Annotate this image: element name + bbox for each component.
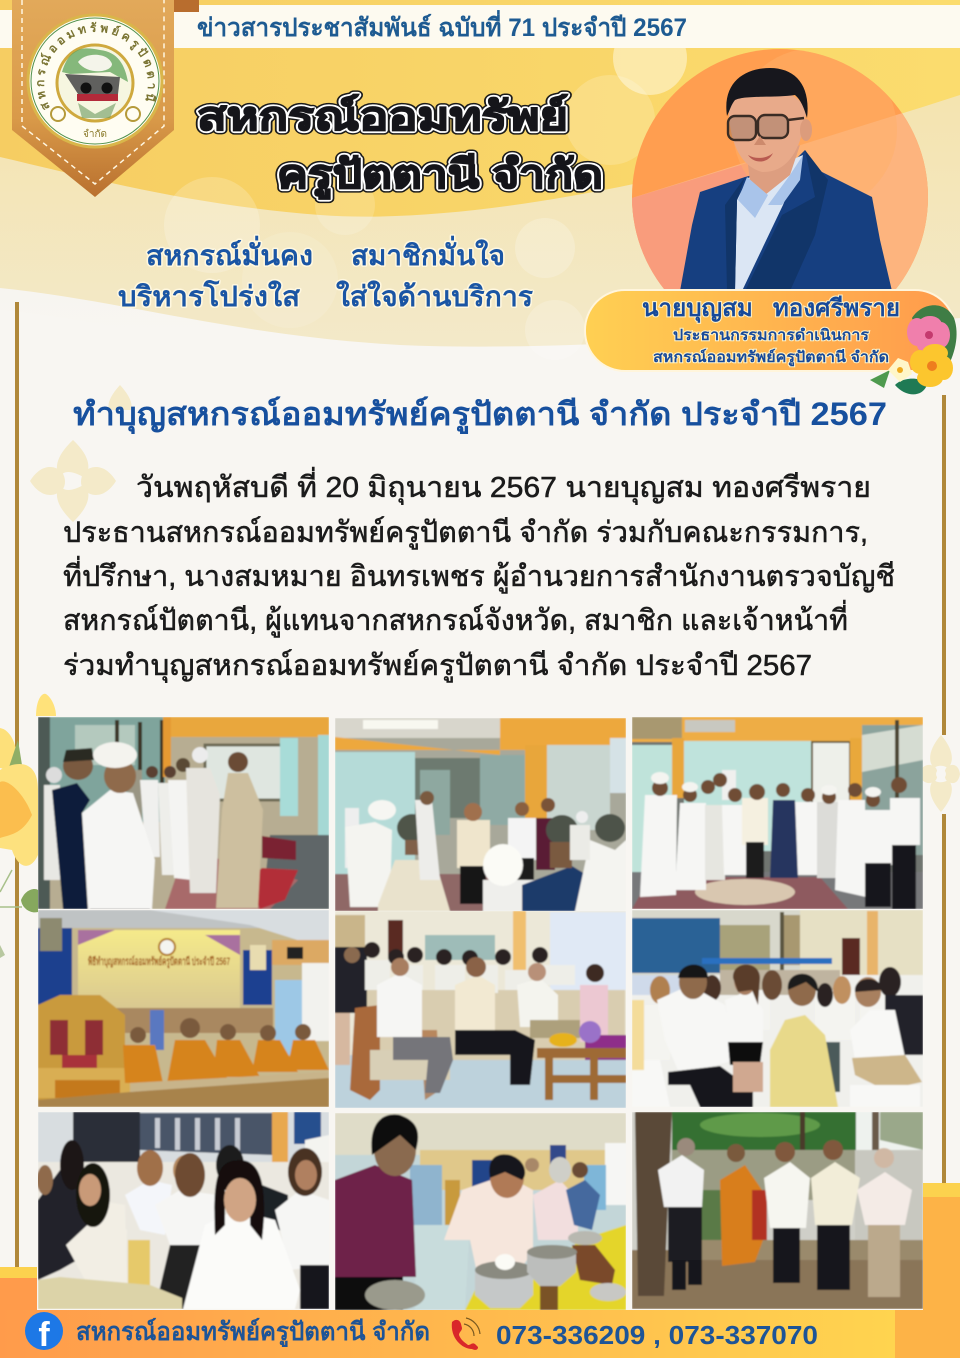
photo 7: women attending	[37, 1112, 329, 1309]
photo 8: merit offering	[335, 1113, 626, 1310]
bottom corner colour blocks	[0, 1183, 960, 1358]
footer: facebook icon: f	[38, 1316, 50, 1354]
suit	[680, 150, 892, 291]
neck	[748, 145, 800, 195]
lapel	[745, 150, 828, 291]
portrait of the chairman	[632, 49, 928, 289]
footer: facebook icon	[25, 1312, 63, 1354]
body text: ประธานสหกรณ์ออมทรัพย์ครูปัตตานี จำกัด ร่วมกับคณะกรรมการ,	[63, 516, 868, 550]
photo 4: monks and banner	[38, 910, 329, 1107]
top title strip: ข่าวสารประชาสัมพันธ์ ฉบับที่ 71 ประจำปี 2567	[197, 10, 687, 42]
organisation title	[197, 94, 603, 199]
logo: สหกรณ์ออมทรัพย์ครูปัตตานี	[37, 22, 156, 110]
shirt	[735, 155, 803, 291]
collar	[738, 155, 803, 218]
ribbon badge with logo	[12, 0, 199, 197]
slogan: สมาชิกมั่นใจ	[351, 235, 505, 271]
logo: จำกัด	[83, 129, 107, 140]
photo 2: chairman meeting guests	[335, 718, 626, 911]
ornament: faint Thai flower motifs	[30, 385, 960, 812]
body text	[63, 467, 895, 683]
photo 5: guests on sofas	[335, 911, 626, 1108]
organisation title: ครูปัตตานี จำกัด	[277, 153, 603, 199]
organisation title: ครูปัตตานี จำกัด	[277, 153, 603, 199]
photo 1: men praying	[38, 717, 329, 910]
photo 6: members with hands pressed	[632, 910, 923, 1107]
gold frame lines	[15, 302, 946, 1267]
footer: organisation name: สหกรณ์ออมทรัพย์ครูปัตตานี จำกัด	[76, 1317, 430, 1348]
photo 3: group photo with envelope	[632, 717, 923, 909]
organisation title: สหกรณ์ออมทรัพย์	[197, 94, 568, 139]
body text: สหกรณ์ปัตตานี, ผู้แทนจากสหกรณ์จังหวัด, สมาชิก และเจ้าหน้าที่	[63, 600, 848, 638]
glasses	[728, 115, 804, 140]
organisation title: สหกรณ์ออมทรัพย์	[197, 94, 568, 139]
footer: phone numbers: 073-336209 , 073-337070	[496, 1320, 818, 1350]
slogan: บริหารโปร่งใส	[118, 279, 301, 312]
heading: ทำบุญสหกรณ์ออมทรัพย์ครูปัตตานี จำกัด ประจำปี 2567	[73, 396, 887, 435]
header background waves	[0, 0, 960, 600]
top title strip	[0, 5, 960, 48]
slogan	[118, 235, 533, 312]
body text: ที่ปรึกษา, นางสมหมาย อินทรเพชร ผู้อำนวยการสำนักงานตรวจบัญชี	[63, 556, 895, 594]
organisation title: ครูปัตตานี จำกัด	[277, 153, 603, 199]
logo	[26, 14, 164, 148]
body text: ร่วมทำบุญสหกรณ์ออมทรัพย์ครูปัตตานี จำกัด ประจำปี 2567	[63, 649, 812, 683]
name plate	[585, 290, 955, 371]
photo 9: group outdoors under trees	[632, 1112, 923, 1309]
decoration: yellow flower at left edge	[0, 694, 56, 958]
name plate: นายบุญสม ทองศรีพราย	[642, 295, 900, 324]
name plate: สหกรณ์ออมทรัพย์ครูปัตตานี จำกัด	[653, 348, 889, 367]
slogan: ใส่ใจด้านบริการ	[336, 280, 533, 312]
slogan: สหกรณ์มั่นคง	[146, 235, 313, 271]
organisation title: สหกรณ์ออมทรัพย์	[197, 94, 568, 139]
photo 4: monks and banner: พิธีทำบุญสหกรณ์ออมทรัพย์ครูปัตตานี ประจำปี 2567	[88, 955, 230, 969]
name plate: ประธานกรรมการดำเนินการ	[673, 326, 870, 344]
icon: tropical flowers	[870, 305, 957, 394]
body text: วันพฤหัสบดี ที่ 20 มิถุนายน 2567 นายบุญสม ทองศรีพราย	[136, 467, 871, 505]
head	[729, 89, 806, 172]
icon: phone	[452, 1318, 480, 1350]
